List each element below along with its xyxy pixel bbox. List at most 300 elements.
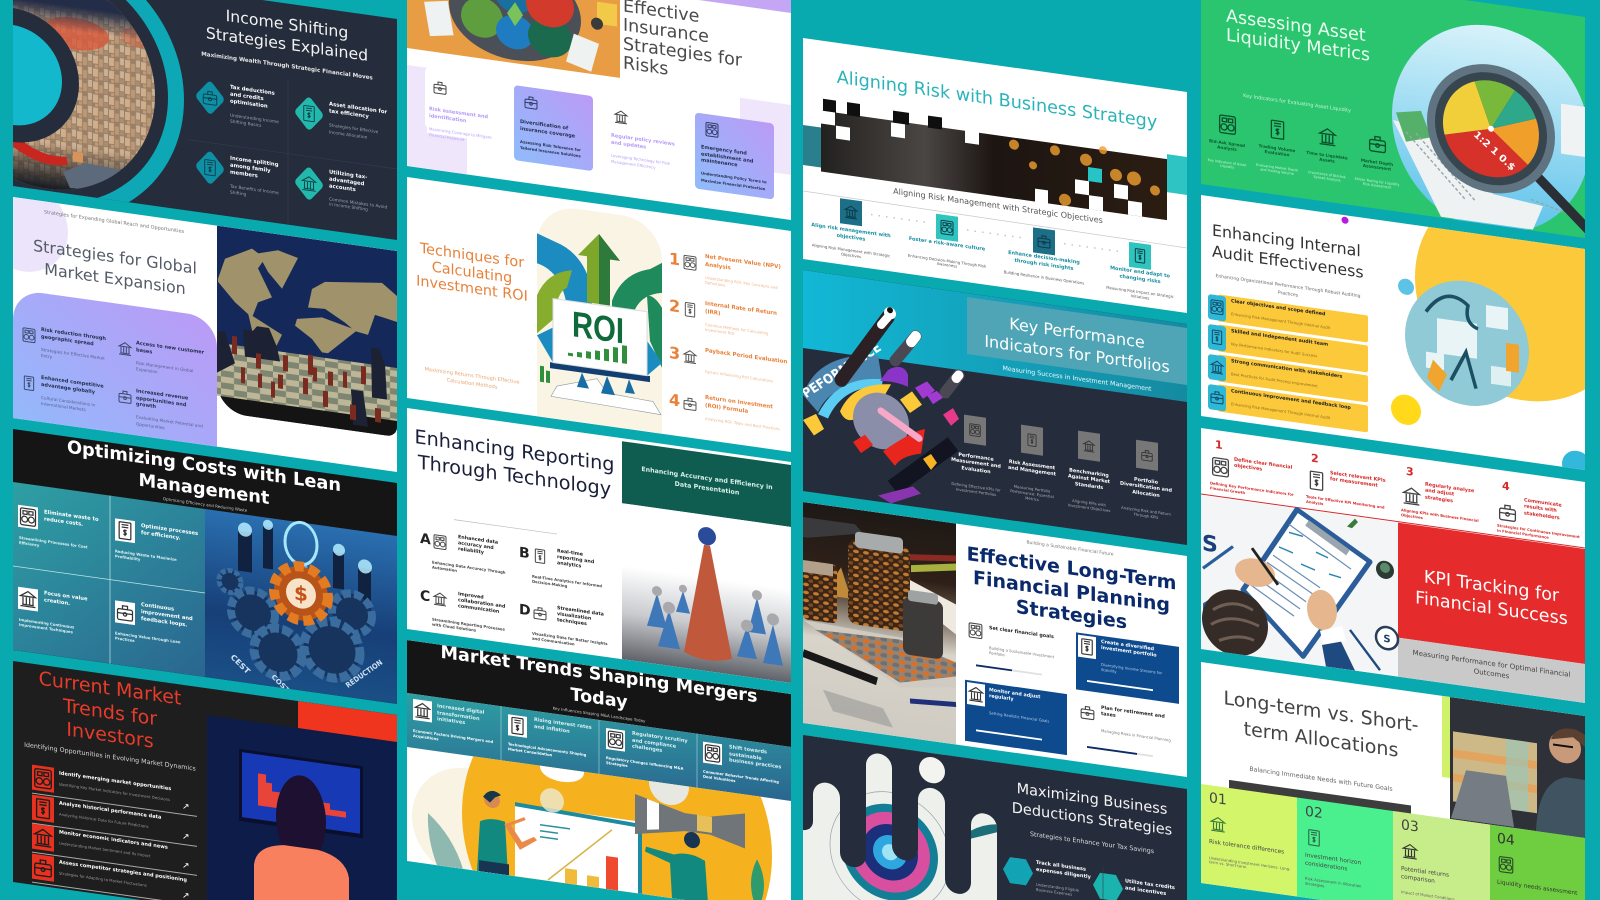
item 1 xyxy=(1036,860,1094,900)
column 1 xyxy=(411,699,501,759)
subtitle: Enhancing Organizational Performance Through Robust Auditing Practices xyxy=(1216,274,1360,299)
image: woman viewing chart xyxy=(207,701,397,900)
heading xyxy=(33,236,197,298)
column 4: 04 xyxy=(1497,831,1515,849)
step 3: Building Resilience in Business Operations xyxy=(1004,269,1084,286)
image: clipboard and red title block: S xyxy=(1383,634,1391,646)
icon: monitor xyxy=(967,682,985,707)
heading: KPI Tracking for xyxy=(1424,567,1559,606)
item 1 xyxy=(41,327,106,360)
image: analyst at laptop and coloured columns xyxy=(1201,662,1585,900)
item C: Streamlining Reporting Processes with Cloud Solutions xyxy=(432,617,505,633)
heading xyxy=(623,0,742,80)
heading xyxy=(1212,220,1402,288)
heading: Techniques for xyxy=(420,241,524,271)
image: gears and teal grid: COST xyxy=(270,673,292,694)
item 1 xyxy=(230,84,279,129)
image: magnifier over liquidity dial xyxy=(1201,0,1585,238)
top line: Building a Sustainable Financial Future xyxy=(1026,540,1114,558)
column 2 xyxy=(508,712,598,773)
row 3 xyxy=(1208,356,1368,400)
item 4: Communicate results with stakeholders xyxy=(1524,497,1562,521)
item 4: Continuous improvement and feedback loops. xyxy=(141,602,193,628)
panel: investment ROI slide xyxy=(407,177,791,452)
row 4: Continuous improvement and feedback loop xyxy=(1231,389,1351,411)
panel: internal audit slide xyxy=(1201,195,1585,470)
column 1: Defining Effective KPIs for Investment Portfolios xyxy=(951,481,1001,497)
icon 1 xyxy=(18,505,38,530)
column 4: Liquidity needs assessment xyxy=(1497,880,1577,897)
panel: asset liquidity slide xyxy=(1201,0,1585,238)
icon 4 xyxy=(706,122,718,138)
item 1: Strategies for Effective Market Entry xyxy=(41,346,105,360)
list row 1: ↗ xyxy=(182,802,190,813)
column 1: Bid-Ask Spread Analysis xyxy=(1209,138,1245,152)
item 3: Factors Influencing ROI Calculations xyxy=(705,369,773,383)
item 1 xyxy=(429,106,492,142)
column 1: Increased digital transformation initiatives xyxy=(437,703,484,726)
heading xyxy=(1226,8,1396,69)
step 1: Align risk management with objectives xyxy=(811,222,891,242)
item D: Streamlined data visualization techniques xyxy=(557,606,604,628)
panel: mergers market trends slide xyxy=(407,640,791,900)
subtitle: Optimizing Efficiency and Reducing Waste xyxy=(163,496,247,513)
card 1 xyxy=(989,626,1065,667)
column 1 xyxy=(949,451,1003,499)
item 1: Understanding Eligible Business Expenses xyxy=(1036,882,1079,897)
column 3: Regulatory Changes Influencing M&A Strategies xyxy=(606,756,683,771)
column 1: Understanding Investment Horizons: Long-term vs. Short-term xyxy=(1209,855,1290,871)
image: magnifier over liquidity dial: 1:2 1 0.$ xyxy=(1471,130,1517,173)
item 2: Optimize processes for efficiency. xyxy=(141,523,198,541)
item 3: Tax Benefits of Income Shifting xyxy=(230,184,279,198)
subtitle: Outcomes xyxy=(1474,667,1509,680)
heading: Insurance xyxy=(623,15,709,47)
column 4: Consumer Behavior Trends Affecting Deal Valuations xyxy=(703,770,779,784)
item 1: Eliminate waste to reduce costs. xyxy=(44,509,99,528)
item 3 xyxy=(41,375,104,412)
image: analysts with chart on yellow circle xyxy=(407,640,791,900)
image: coin jars and cards xyxy=(803,502,1187,777)
image: gears and teal grid: REDUCTION xyxy=(344,658,385,690)
card 3: Monitor and adjust regularly xyxy=(989,688,1040,703)
item 4: 4 xyxy=(1502,479,1510,493)
icon 3 xyxy=(1082,436,1096,456)
item 2: Tools for Effective KPI Monitoring and Analysis xyxy=(1306,495,1384,510)
item 2 xyxy=(329,101,388,140)
item 3: Payback Period Evaluation xyxy=(705,348,787,365)
image: world map and chessboard xyxy=(13,197,397,447)
item 1: Defining Key Performance Indicators for Financial Growth xyxy=(1210,481,1294,497)
item 1: 1 xyxy=(1215,438,1223,452)
image: banner and cone with pawns xyxy=(454,441,791,683)
item 1: Risk reduction through geographic spread xyxy=(41,327,106,347)
icon: goals xyxy=(967,620,984,641)
list row 2: Analyzing Historical Data for Future Predictions xyxy=(59,811,149,829)
item 4: Return on Investment (ROI) Formula xyxy=(705,395,773,414)
step 4: Monitor and adapt to changing risks xyxy=(1110,265,1170,285)
row 4 xyxy=(1208,386,1368,430)
column 3: Time to Liquidate Assets xyxy=(1306,150,1348,164)
item A: A xyxy=(420,531,431,548)
list row 3: Understanding Market Sentiment and Its Impact xyxy=(59,840,151,858)
card 1: Set clear financial goals xyxy=(989,626,1054,640)
image: clipboard and red title block: S xyxy=(1202,530,1218,558)
column 4 xyxy=(1497,830,1583,899)
item 3: Enhanced competitive advantage globally xyxy=(41,375,104,395)
heading: Market Trends Shaping Mergers xyxy=(441,643,757,707)
item 3: 3 xyxy=(669,343,680,363)
item 2: Diversification of insurance coverage xyxy=(520,119,575,139)
row 1: Clear objectives and scope defined xyxy=(1231,299,1325,317)
icon 2 xyxy=(939,218,955,237)
step 2: Enhancing Decision-Making Through Risk Awareness xyxy=(908,252,986,269)
item 2: Common Methods for Calculating Investment ROI xyxy=(705,322,768,336)
subtitle: Key Influences Shaping M&A Landscape Today xyxy=(553,705,645,723)
item 1: 1 xyxy=(669,249,680,269)
subtitle: Measuring Performance for Optimal Financial xyxy=(1413,649,1570,679)
column 4: Stress Testing for Liquidity Risk Assessment xyxy=(1355,176,1399,190)
icon 3 xyxy=(1036,232,1052,251)
column 2 xyxy=(1254,114,1300,178)
heading: Deductions Strategies xyxy=(1012,800,1172,839)
item 4 xyxy=(1497,479,1585,547)
column 1 xyxy=(1209,789,1295,878)
column 1: Risk tolerance differences xyxy=(1209,839,1284,856)
item 3: Aligning KPIs with Business Financial Objectives xyxy=(1401,508,1479,523)
heading: Audit Effectiveness xyxy=(1212,242,1364,282)
item D: Visualizing Data for Better Insights and Communication xyxy=(532,631,607,646)
heading: Investment ROI xyxy=(416,273,528,305)
item 2 xyxy=(136,340,204,374)
heading: Calculating xyxy=(432,259,512,286)
item 4: Emergency fund establishment and maintenance xyxy=(701,144,753,168)
icon 2 xyxy=(1025,430,1039,450)
heading: term Allocations xyxy=(1244,718,1398,762)
heading: Enhancing Reporting xyxy=(415,425,614,476)
item 4: Increased revenue opportunities and growth xyxy=(136,388,188,410)
item 2: Risk Management in Global Expansion xyxy=(136,360,193,374)
heading: Effective Long-Term xyxy=(967,543,1176,594)
column 2: Measuring Portfolio Performance: Essential Metrics xyxy=(1010,483,1054,502)
image: gears and teal grid: $ xyxy=(294,581,308,606)
item 3 xyxy=(230,155,279,198)
image: city blocks in teal ring xyxy=(13,0,397,224)
image: ROI board with arrows: ROI xyxy=(572,303,624,351)
item 1 support: Streamlining Processes for Cost Efficiency xyxy=(19,535,88,549)
icon 1 xyxy=(843,203,859,222)
column 3: Benchmarking Against Market Standards xyxy=(1068,467,1110,491)
item B: B xyxy=(519,545,530,562)
column 3: Importance of Bid-Ask Spread Analysis xyxy=(1308,170,1346,183)
item 1: Define clear financial objectives xyxy=(1234,457,1292,473)
row 4: Enhancing Risk Management Through Internal Audit xyxy=(1231,401,1330,420)
list row 2 xyxy=(32,794,197,846)
icon 4 xyxy=(1132,246,1148,265)
panel: income shifting slide xyxy=(13,0,397,240)
column 1: Performance Measurement and Evaluation xyxy=(951,452,1001,475)
item 4: Understanding Policy Terms to Maximize Financial Protection xyxy=(701,170,767,191)
column 1: 01 xyxy=(1209,790,1227,809)
column 4: Analyzing Risk and Return Through KPIs xyxy=(1121,505,1171,520)
column 4 xyxy=(703,740,791,800)
panel: global market expansion slide xyxy=(13,197,397,472)
item 2: Assessing Risk Tolerance for Tailored Insurance Solutions xyxy=(520,138,581,158)
heading: Aligning Risk with Business Strategy xyxy=(837,68,1157,133)
item D: D xyxy=(519,602,531,619)
icon 4 xyxy=(115,600,135,625)
row 1: Enhancing Risk Management Through Internal Audit xyxy=(1231,311,1330,330)
item C xyxy=(420,587,515,644)
heading: Income Shifting xyxy=(226,6,348,42)
image: yellow blob with audit illustration xyxy=(1201,195,1585,470)
column 3: Regulatory scrutiny and compliance challenges xyxy=(632,731,688,754)
step 1: Aligning Risk Management with Strategic Objectives xyxy=(812,242,890,259)
image: dark business bokeh band with checker squares xyxy=(803,38,1187,313)
item 4 support: Enhancing Value through Lean Practices xyxy=(115,630,180,645)
item 1: Net Present Value (NPV) Analysis xyxy=(705,254,781,271)
item 4: Utilizing tax-advantaged accounts xyxy=(329,169,367,193)
heading xyxy=(997,776,1187,843)
list row 1: Identify emerging market opportunities xyxy=(59,770,171,792)
step 2 xyxy=(904,235,990,275)
column 4: Portfolio Diversification and Allocation xyxy=(1120,477,1172,499)
item 4: Common Mistakes to Avoid in Income Shifting xyxy=(329,197,387,213)
item B: Real-time reporting and analytics xyxy=(557,549,594,570)
subtitle: Strategies to Enhance Your Tax Savings xyxy=(1030,831,1154,855)
item B xyxy=(519,544,614,602)
heading: Strategies for xyxy=(623,34,742,71)
item 2: Select relevant KPIs for measurement xyxy=(1330,470,1386,489)
column 3 xyxy=(1304,121,1350,185)
item 4 xyxy=(329,169,387,213)
subtitle: Aligning Risk Management with Strategic Objectives xyxy=(893,187,1103,225)
panel: lean cost management slide xyxy=(13,429,397,704)
heading: Financial Planning xyxy=(973,567,1170,617)
icon 1 xyxy=(434,82,446,95)
list row 3 xyxy=(32,824,197,876)
heading: Today xyxy=(570,685,628,713)
panel: KPI tracking slide xyxy=(1201,428,1585,703)
image: target artwork behind rounded cut-outs xyxy=(803,735,1187,900)
heading: Liquidity Metrics xyxy=(1226,26,1370,66)
heading: Risks xyxy=(623,53,668,80)
banner text: Enhancing Accuracy and Efficiency in xyxy=(641,466,773,491)
item 1: Understanding Income Shifting Basics xyxy=(230,113,279,129)
item 2: Internal Rate of Return (IRR) xyxy=(705,301,777,317)
list row 2: Analyze historical performance data xyxy=(59,800,161,820)
image: clipboard and red title block xyxy=(1201,428,1585,703)
card 4: Managing Risks in Financial Planning xyxy=(1101,728,1171,743)
item 4: Evaluating Market Potential and Opportunities xyxy=(136,414,203,430)
card 2: Create a diversified investment portfolio xyxy=(1101,640,1157,659)
row 2: Key Performance Indicators for Audit Success xyxy=(1231,341,1317,358)
item 3: Leveraging Technology for Risk Management Efficiency xyxy=(611,152,670,170)
card 2 xyxy=(1101,640,1173,683)
column 2: Trading Volume Evaluation xyxy=(1259,143,1295,158)
heading: Long-term vs. Short- xyxy=(1223,687,1419,737)
column 2: Rising interest rates and inflation xyxy=(534,717,592,734)
item 2: 2 xyxy=(669,296,680,316)
column 3: Potential returns comparison xyxy=(1401,866,1449,884)
subtitle: Measuring Success in Investment Management xyxy=(1002,365,1152,393)
subtitle: Key Indicators for Evaluating Asset Liquidity xyxy=(1243,93,1351,114)
item 2: Strategies for Effective Income Allocation xyxy=(329,123,378,140)
heading: Strategies for Global xyxy=(33,236,197,278)
item 1: Maximizing Coverage to Mitigate Financial Exposure xyxy=(429,126,492,142)
heading xyxy=(967,307,1187,380)
item 4 xyxy=(669,390,780,431)
item 4: 4 xyxy=(669,390,680,410)
item 3 support: Implementing Continuous Improvement Techniques xyxy=(19,617,74,634)
heading: Assessing Asset xyxy=(1226,7,1366,46)
item 2: 2 xyxy=(1311,451,1319,466)
row 2: Skilled and independent audit team xyxy=(1231,329,1328,348)
list row 4: Assess competitor strategies and positioning xyxy=(59,859,187,883)
heading: Strategies xyxy=(1016,596,1127,634)
icon: access xyxy=(118,342,132,356)
item 3: Cultural Considerations in International Markets xyxy=(41,394,95,412)
list row 4 xyxy=(32,853,197,900)
column 4 xyxy=(1119,474,1173,523)
item 2 xyxy=(520,119,581,158)
item B: Real-Time Analytics for Informed Decision-Making xyxy=(532,574,602,588)
item 2: Access to new customer bases xyxy=(136,340,204,356)
column 3: Aligning KPIs with Investment Objectives xyxy=(1068,498,1110,513)
card 2: Diversifying Income Streams for Stability xyxy=(1101,662,1162,676)
icon: retirement xyxy=(1079,702,1096,723)
panel: portfolio KPI slide xyxy=(803,270,1187,545)
list row 1: Identifying Key Market Indicators for Investment Decisions xyxy=(59,781,170,802)
subtitle: Identifying Opportunities in Evolving Market Dynamics xyxy=(24,742,196,773)
column 2: Risk Assessment and Management xyxy=(1008,459,1056,478)
subtitle: Balancing Immediate Needs with Future Goals xyxy=(1249,766,1393,793)
heading: Maximizing Business xyxy=(1017,781,1167,818)
heading: Indicators for Portfolios xyxy=(984,331,1170,377)
heading xyxy=(1398,563,1585,633)
column 1 xyxy=(1204,109,1250,173)
heading xyxy=(39,668,181,753)
subtitle: Maximizing Wealth Through Strategic Financial Moves xyxy=(201,51,373,82)
card 3: Setting Realistic Financial Goals xyxy=(989,711,1049,724)
banner text: Data Presentation xyxy=(675,480,739,496)
heading: Through Technology xyxy=(418,450,611,500)
step 2: Foster a risk-aware culture xyxy=(909,236,985,253)
column 3 xyxy=(606,726,696,787)
panel: risk and business strategy slide xyxy=(803,38,1187,313)
list row 1 xyxy=(32,765,197,817)
heading: Current Market xyxy=(39,668,181,710)
item C: Improved collaboration and communication xyxy=(458,592,505,615)
panel: business deductions slide xyxy=(803,735,1187,900)
column 4 xyxy=(1354,129,1400,192)
card 1: Building a Sustainable Investment Portfolio xyxy=(989,645,1054,660)
column 2: Risk Assessment in Allocation Strategies xyxy=(1305,876,1361,889)
image: gears and teal grid: CEST xyxy=(229,653,252,676)
item 1: Risk assessment and identification xyxy=(429,106,488,124)
item 3: Focus on value creation. xyxy=(44,590,88,607)
item 4 xyxy=(136,388,203,430)
icon: risk xyxy=(22,327,36,344)
step 1 xyxy=(808,222,894,265)
column 3: 03 xyxy=(1401,817,1419,836)
list row 3: ↗ xyxy=(182,861,190,872)
panel: reporting technology slide xyxy=(407,408,791,683)
column 2 xyxy=(1305,803,1369,896)
item 3 xyxy=(1401,464,1496,533)
icon 2 xyxy=(524,96,538,110)
icon: revenue xyxy=(118,390,132,404)
item A: Enhanced data accuracy and reliability xyxy=(458,535,498,556)
column 2: Investment horizon considerations xyxy=(1305,853,1361,872)
heading: Financial Success xyxy=(1415,588,1568,630)
image: strategy ovals and cards xyxy=(407,0,791,199)
icon 3 xyxy=(614,110,628,124)
item 2 xyxy=(1306,451,1401,520)
column 4: Shift towards sustainable business practices xyxy=(729,744,781,771)
column 2: Technological Advancements Shaping Market Consolidation xyxy=(508,742,586,757)
item D xyxy=(519,601,614,658)
heading: Market Expansion xyxy=(44,259,186,298)
item 1: Understanding ROI: Key Concepts and Definitions xyxy=(705,275,778,290)
icon 2 xyxy=(115,518,135,543)
icon 3 xyxy=(18,587,38,612)
item 3: Regularly analyze and adjust strategies xyxy=(1425,481,1474,504)
card 3 xyxy=(989,688,1061,727)
column 3 xyxy=(1062,466,1116,515)
column 3 xyxy=(1401,816,1459,900)
heading: Enhancing Internal xyxy=(1212,221,1361,260)
icon: portfolio xyxy=(1078,635,1096,659)
image: ROI board with arrows xyxy=(537,208,662,434)
list row 2: ↗ xyxy=(182,831,190,842)
list row 3: Monitor economic indicators and news xyxy=(59,829,168,851)
step 4 xyxy=(1097,263,1183,306)
heading: Key Performance xyxy=(1009,314,1145,352)
item 3: Income splitting among family members xyxy=(230,155,278,179)
icon: edge xyxy=(24,376,34,391)
heading: Trends for xyxy=(63,695,157,730)
heading: Investors xyxy=(66,718,154,753)
step 4: Measuring Risk Impact on Strategic Initiatives xyxy=(1106,285,1174,301)
item 2 xyxy=(669,296,777,336)
item A: Enhancing Data Accuracy Through Automation xyxy=(432,560,506,575)
item 2: Utilize tax credits and incentives xyxy=(1125,878,1175,897)
panel: insurance strategies slide xyxy=(407,0,791,220)
item A xyxy=(420,530,515,588)
item 4: Analyzing ROI: Tools and Best Practices xyxy=(705,416,780,431)
column 2: Evaluating Market Depth and Trading Volume xyxy=(1256,163,1298,176)
column 1: Key Indicators of Asset Liquidity xyxy=(1208,158,1246,170)
column 2: 02 xyxy=(1305,804,1323,822)
item 1 xyxy=(669,249,781,290)
heading: Optimizing Costs with Lean xyxy=(67,437,341,496)
row 3: Strong communication with stakeholders xyxy=(1231,359,1342,380)
icon 4 xyxy=(1140,445,1154,465)
heading: Strategies Explained xyxy=(206,23,368,65)
item 2 support: Reducing Waste to Maximize Profitability xyxy=(115,548,177,562)
heading xyxy=(407,636,791,738)
list row 4: Strategies for Adapting to Market Fluctuations xyxy=(59,870,147,887)
item 3: Regular policy reviews and updates xyxy=(611,133,675,150)
panel: current market trends slide xyxy=(13,661,397,900)
image: gears and teal grid xyxy=(13,482,397,704)
card 4: Plan for retirement and taxes xyxy=(1101,706,1165,720)
subtitle: Maximizing Returns Through Effective Calculation Methods xyxy=(425,366,519,391)
panel: long and short term allocation slide xyxy=(1201,662,1585,900)
item 1: Track all business expenses diligently xyxy=(1036,860,1091,880)
heading xyxy=(956,542,1187,643)
